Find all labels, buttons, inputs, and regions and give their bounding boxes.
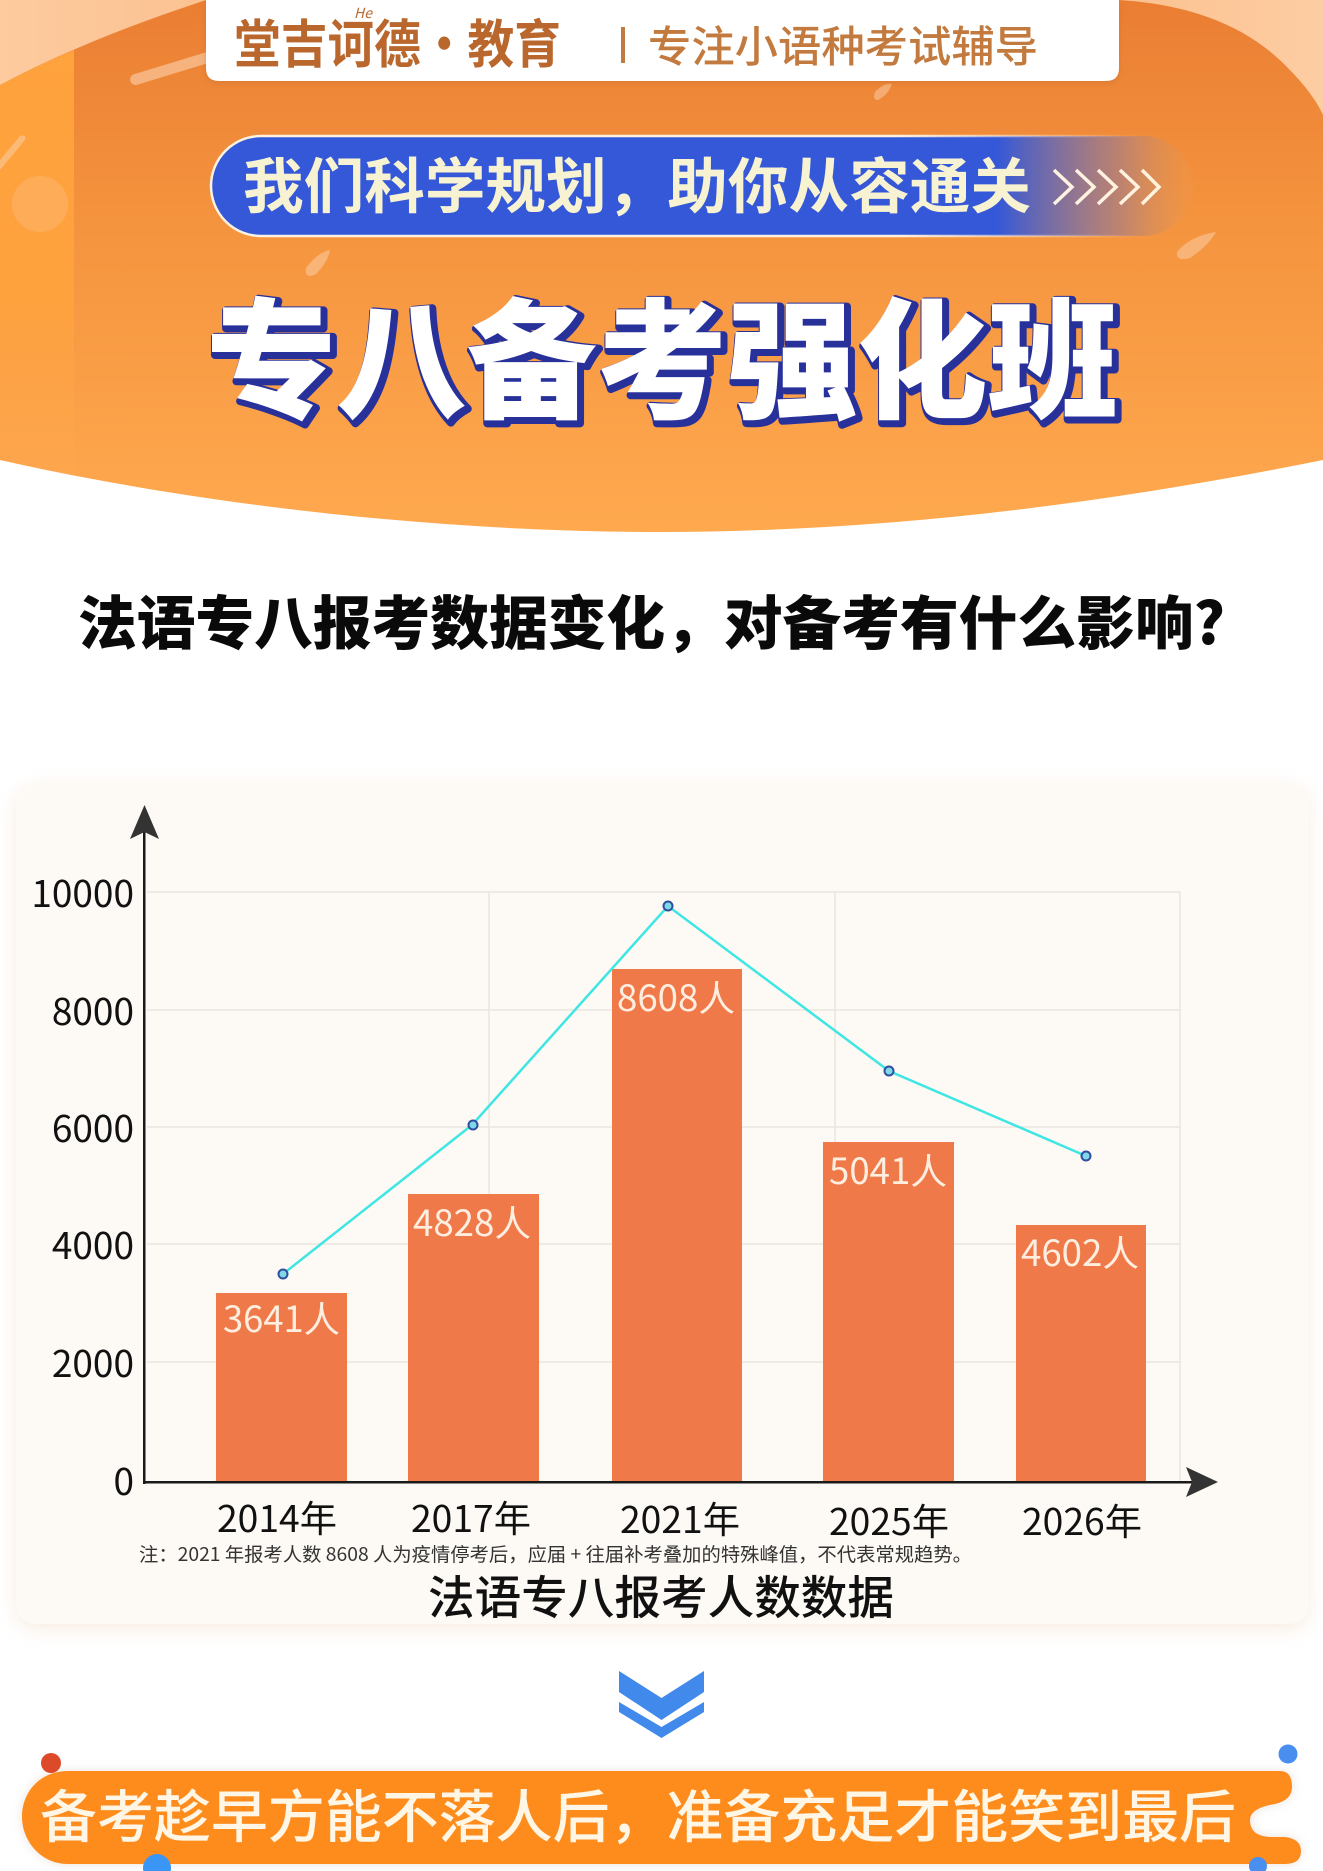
x axis labels: 2014年 [217,1489,337,1543]
header background [0,0,1323,532]
bar value labels: 5041人 [829,1143,947,1195]
y axis labels: 6000 [52,1099,134,1153]
footnote: 注：2021 年报考人数 8608 人为疫情停考后，应届 + 往届补考叠加的特殊峰值，不代表常规趋势。 [139,1540,972,1567]
bars [216,969,1146,1482]
brand name: He [354,3,373,23]
banner text: 备考趁早方能不落人后，准备充足才能笑到最后 [40,1772,1236,1854]
x axis labels: 2026年 [1022,1492,1142,1546]
bar value labels: 4602人 [1021,1225,1139,1277]
banner shape [22,1771,1301,1864]
y axis labels: 2000 [52,1334,134,1388]
y axis labels: 0 [113,1452,134,1506]
x axis labels [217,1489,1142,1546]
x axis labels: 2025年 [829,1492,949,1546]
x axis [144,1467,1218,1497]
icon: chevrons [1054,170,1159,204]
brand name: 堂吉诃德·教育 [234,3,561,78]
y axis labels: 8000 [52,982,134,1036]
logo bar [206,0,1119,81]
icon: double chevron arrow [619,1671,704,1738]
trend line [278,902,1090,1278]
bar value labels: 8608人 [617,970,735,1022]
section heading: 法语专八报考数据变化，对备考有什么影响? [78,577,1225,661]
main title: 专八备考强化班 [206,258,1118,446]
main title: 专八备考强化班 [209,261,1121,449]
x axis labels: 2017年 [411,1489,531,1543]
chart caption: 法语专八报考人数数据 [428,1562,894,1628]
bar chart [31,805,1218,1546]
x axis labels: 2021年 [620,1490,740,1544]
bar value labels: 4828人 [413,1195,531,1247]
banner decorative dots [41,1744,1298,1871]
pill text: 我们科学规划，助你从容通关 [243,139,1031,226]
y axis [130,805,159,1484]
pill banner [211,136,1193,236]
y axis labels: 10000 [31,864,134,918]
bar value labels [223,970,1139,1343]
panel: chart card [16,783,1309,1628]
bottom banner [22,1744,1301,1871]
grid lines [147,892,1180,1482]
y axis labels: 4000 [52,1216,134,1270]
bar value labels: 3641人 [223,1291,340,1343]
divider and slogan: 专注小语种考试辅导 [648,13,1038,75]
y axis labels [31,864,134,1506]
